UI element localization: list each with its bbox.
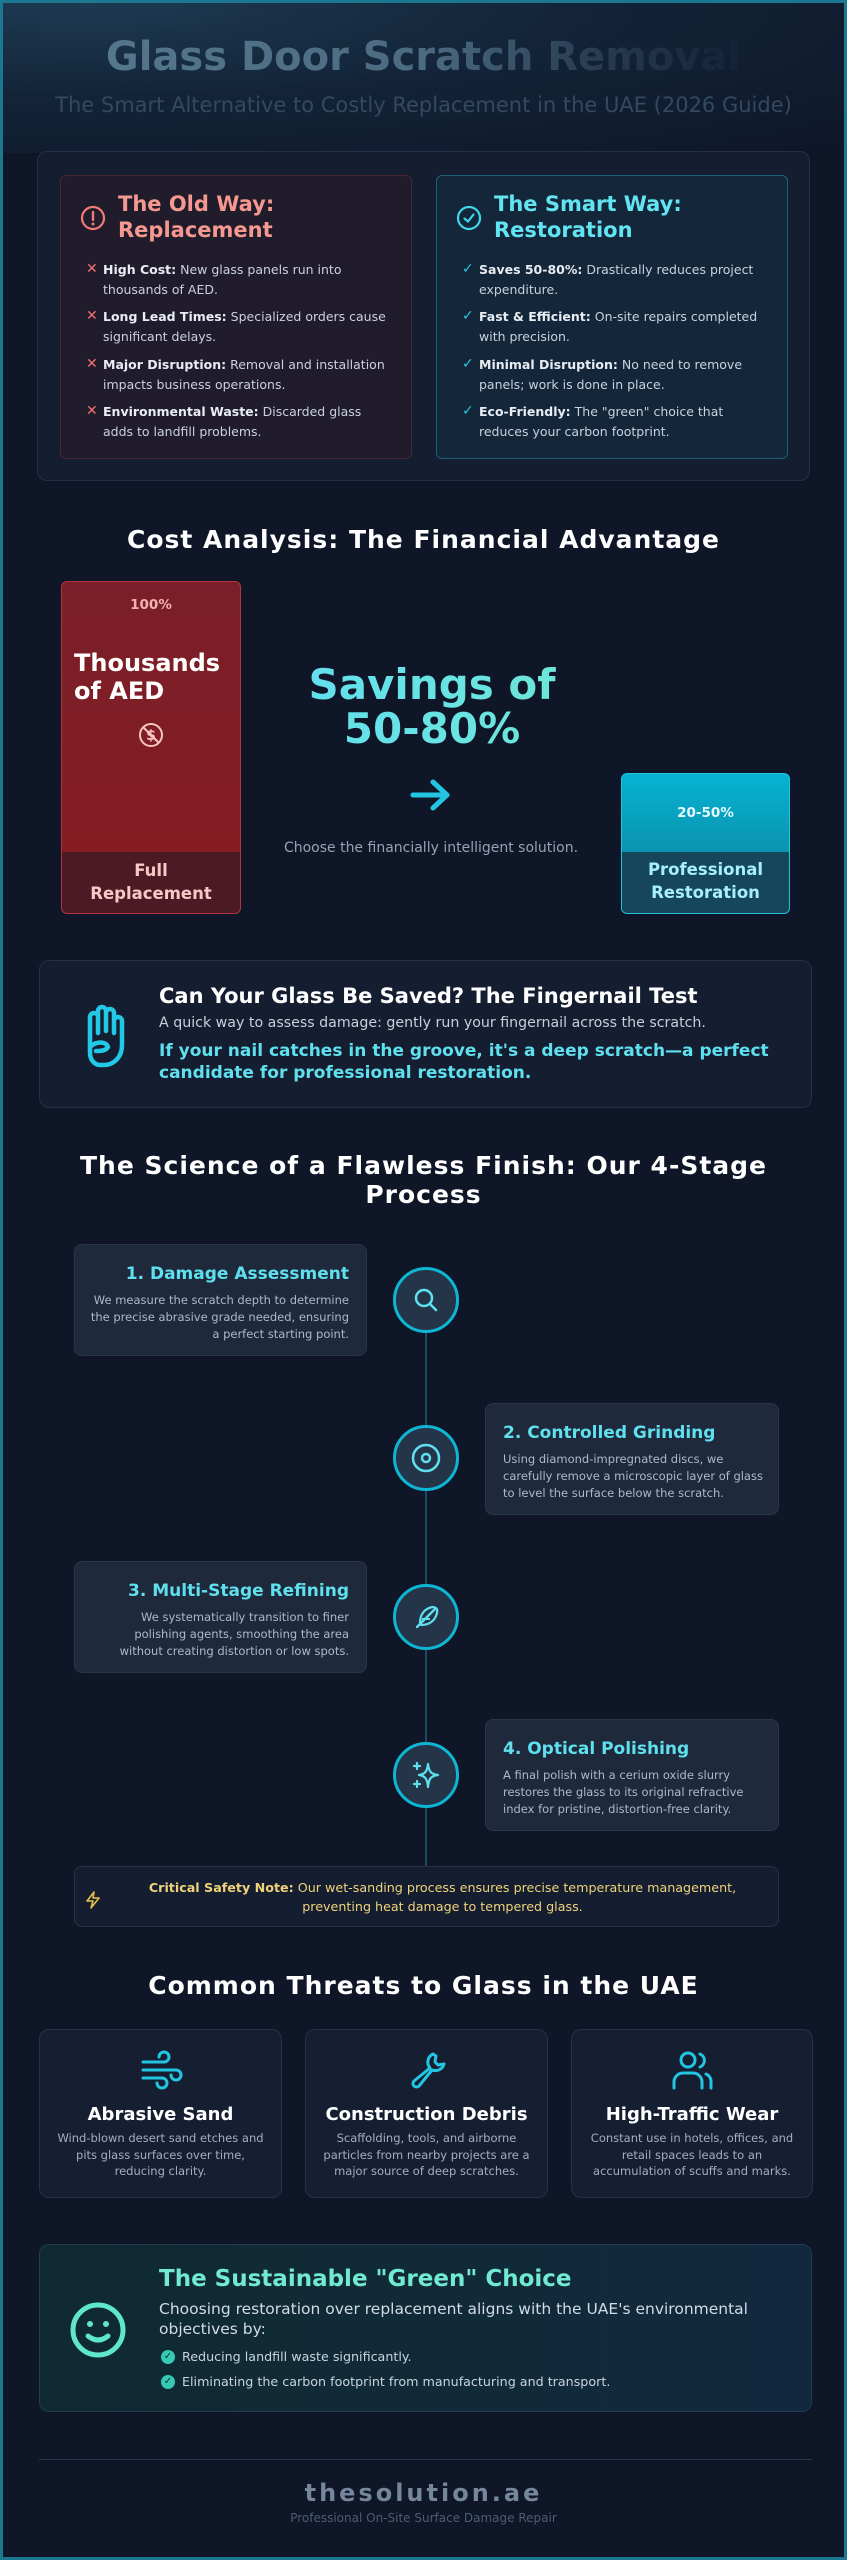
card: smart way: ✓	[462, 356, 474, 372]
card: abrasive sand: Wind-blown desert sand etches and pits glass surfaces over time, reducing clarity.	[57, 2131, 264, 2178]
heading: old way: The Old Way:	[118, 192, 274, 216]
card: smart way: Fast & Efficient: On-site repairs completed with precision.	[479, 309, 757, 344]
card: high-traffic wear: Constant use in hotels, offices, and retail spaces leads to an accumulation of scuffs and marks.	[591, 2131, 793, 2178]
step 1: We measure the scratch depth to determine the precise abrasive grade needed, ensuring a perfect starting point.	[91, 1293, 349, 1341]
bar: professional restoration	[621, 773, 790, 914]
subtitle: The Smart Alternative to Costly Replacement in the UAE (2026 Guide)	[55, 93, 792, 117]
bar: professional restoration: Restoration	[651, 883, 760, 902]
text: sustainable: ✓	[164, 2376, 172, 2387]
callout: savings: 50-80%	[344, 704, 520, 753]
text: sustainable: Reducing landfill waste significantly.	[182, 2349, 412, 2364]
footer: thesolution.ae	[305, 2479, 542, 2507]
card: smart way: Saves 50-80%: Drastically reduces project expenditure.	[479, 262, 753, 296]
card: abrasive sand: Abrasive Sand	[88, 2104, 233, 2125]
text: sustainable: Choosing restoration over replacement aligns with the UAE's environmental objectives by:	[159, 2300, 748, 2338]
heading: process: The Science of a Flawless Finish: Our 4-Stage Process	[80, 1151, 767, 1209]
icon: wind	[142, 2050, 182, 2090]
heading: common threats: Common Threats to Glass in the UAE	[148, 1971, 699, 2000]
step 4: A final polish with a cerium oxide slurry restores the glass to its original refractive index for pristine, distortion-free clarity.	[503, 1768, 743, 1816]
icon: check circle	[456, 206, 482, 230]
heading: cost analysis: Cost Analysis: The Financial Advantage	[127, 525, 720, 554]
text: fingernail: A quick way to assess damage: gently run your fingernail across the scratch.	[159, 1015, 706, 1031]
icon: hand	[88, 1004, 124, 1068]
bar: full replacement: 100%	[130, 597, 172, 613]
text: sustainable: The Sustainable "Green" Choice	[159, 2266, 571, 2292]
callout: savings	[308, 660, 556, 753]
step 4: 4. Optical Polishing	[503, 1739, 689, 1759]
card: old way: ✕	[86, 356, 98, 372]
bar: full replacement: of AED	[74, 677, 164, 705]
text: sustainable: Eliminating the carbon footprint from manufacturing and transport.	[182, 2374, 610, 2389]
panel: fingernail test	[39, 960, 812, 1108]
heading: old way: Replacement	[118, 218, 273, 242]
bar: full replacement: Thousands	[74, 649, 220, 677]
icon: disc	[393, 1425, 459, 1491]
heading: old way	[118, 192, 274, 242]
icon: feather	[393, 1584, 459, 1650]
footer	[290, 2479, 557, 2525]
bar: full replacement: Replacement	[90, 884, 212, 903]
heading: smart way: Restoration	[494, 218, 633, 242]
callout: safety note: Critical Safety Note: Our wet-sanding process ensures precise temperature management, preventing heat damage to tempered glass.	[149, 1880, 736, 1914]
list: smart way	[462, 261, 757, 438]
step 4	[485, 1719, 779, 1831]
card: old way: High Cost: New glass panels run into thousands of AED.	[103, 262, 341, 296]
card: old way: ✕	[86, 261, 98, 277]
heading: smart way	[494, 192, 682, 242]
step 2	[485, 1403, 779, 1515]
timeline line	[425, 1273, 427, 1908]
card: smart way: ✓	[462, 403, 474, 419]
text: sustainable: ✓	[164, 2351, 172, 2362]
card: old way: Long Lead Times: Specialized orders cause significant delays.	[103, 309, 386, 344]
step 3	[74, 1561, 367, 1673]
card: old way: ✕	[86, 308, 98, 324]
card: old way: Environmental Waste: Discarded glass adds to landfill problems.	[103, 404, 361, 438]
icon: money off: $	[146, 728, 156, 744]
step 2: Using diamond-impregnated discs, we carefully remove a microscopic layer of glass to level the surface below the scratch.	[503, 1452, 763, 1500]
panel: comparison	[37, 151, 810, 481]
icon: users	[672, 2052, 712, 2090]
list: old way	[86, 261, 386, 438]
icon: money off	[139, 723, 163, 747]
step 2: 2. Controlled Grinding	[503, 1423, 715, 1443]
callout: savings: Savings of	[308, 660, 556, 709]
card: smart way: Minimal Disruption: No need to remove panels; work is done in place.	[479, 357, 742, 392]
card: abrasive sand	[39, 2029, 282, 2198]
icon: wrench	[412, 2052, 446, 2088]
footer: Professional On-Site Surface Damage Repair	[290, 2511, 557, 2525]
card: old way: Major Disruption: Removal and installation impacts business operations.	[103, 357, 385, 392]
text: fingernail: Can Your Glass Be Saved? The Fingernail Test	[159, 984, 698, 1008]
bar: full replacement	[61, 581, 241, 914]
card: construction debris	[305, 2029, 548, 2198]
panel: sustainable choice	[39, 2244, 812, 2412]
card: old way	[60, 175, 412, 459]
text: fingernail	[159, 984, 769, 1083]
bar: full replacement: Full	[134, 861, 168, 880]
bar: professional restoration: Professional	[648, 860, 763, 879]
icon: search	[393, 1267, 459, 1333]
card: construction debris: Construction Debris	[325, 2104, 528, 2125]
text: sustainable	[159, 2266, 748, 2389]
step 1	[74, 1244, 367, 1356]
heading: smart way: The Smart Way:	[494, 192, 682, 216]
callout: safety note	[74, 1866, 779, 1927]
card: high-traffic wear: High-Traffic Wear	[606, 2104, 778, 2125]
step 1: 1. Damage Assessment	[126, 1264, 349, 1284]
icon: warning	[80, 206, 106, 230]
card: old way: ✕	[86, 403, 98, 419]
arrow	[410, 780, 450, 810]
card: smart way	[436, 175, 788, 459]
step 3: We systematically transition to finer polishing agents, smoothing the area without creating distortion or low spots.	[120, 1610, 349, 1658]
text: fingernail: If your nail catches in the groove, it's a deep scratch—a perfect candidate for professional restoration.	[159, 1041, 769, 1083]
card: smart way: ✓	[462, 261, 474, 277]
caption: Choose the financially intelligent solution.	[284, 840, 578, 856]
icon: bolt	[86, 1891, 100, 1909]
title: Glass Door Scratch Removal	[106, 34, 741, 80]
card: smart way: Eco-Friendly: The "green" choice that reduces your carbon footprint.	[479, 404, 723, 438]
icon: sparkles	[393, 1742, 459, 1808]
step 3: 3. Multi-Stage Refining	[128, 1581, 349, 1601]
icon: smile	[70, 2302, 126, 2358]
card: smart way: ✓	[462, 308, 474, 324]
card: construction debris: Scaffolding, tools, and airborne particles from nearby projects are a major source of deep scratches.	[323, 2131, 530, 2178]
card: high-traffic wear	[571, 2029, 813, 2198]
bar: professional restoration: 20-50%	[677, 805, 734, 821]
